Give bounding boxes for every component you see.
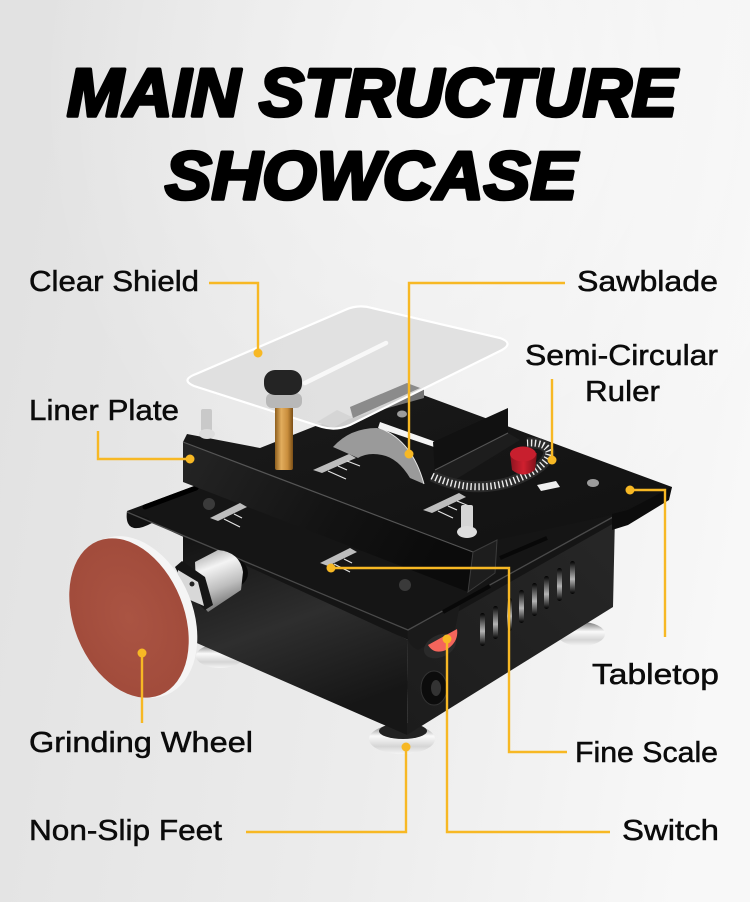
title: SHOWCASE <box>165 138 580 214</box>
red knob <box>510 446 537 474</box>
callout: Liner Plate: Liner Plate <box>29 395 179 427</box>
clear shield <box>187 306 508 429</box>
thumb screw: left <box>199 409 215 439</box>
scale: top right <box>423 493 469 518</box>
mitre fence <box>433 408 520 486</box>
tabletop edge <box>612 487 672 530</box>
callout: Grinding Wheel <box>29 648 253 759</box>
callout: Clear Shield: Clear Shield <box>29 266 199 298</box>
callout: Semi-Circular Ruler: Ruler <box>585 376 661 408</box>
callout: Semi-Circular Ruler <box>525 340 719 464</box>
foot: front <box>369 723 435 754</box>
callout: Clear Shield <box>29 266 262 358</box>
callout: Tabletop <box>592 486 719 691</box>
housing right face <box>407 515 615 735</box>
fine scale markers <box>210 454 469 572</box>
ventilation slots <box>480 561 575 646</box>
thumb screw: right <box>457 505 477 538</box>
callout: Semi-Circular Ruler: Semi-Circular <box>525 340 719 372</box>
scale: top left <box>313 454 360 479</box>
blade slot insert <box>378 422 436 447</box>
power jack <box>421 671 447 705</box>
callout: Non-Slip Feet: Non-Slip Feet <box>29 815 222 847</box>
gold post with knob <box>264 370 302 470</box>
callout: Liner Plate <box>29 395 194 464</box>
screw: tabletop <box>397 410 599 487</box>
gray fence block seen through shield <box>350 383 420 418</box>
housing left face <box>183 530 408 735</box>
callout: Switch <box>442 634 719 847</box>
scale: tray centre <box>320 548 357 572</box>
callout: Switch: Switch <box>622 815 719 847</box>
callout: Fine Scale: Fine Scale <box>575 737 718 769</box>
title: MAIN STRUCTURE <box>67 55 680 131</box>
drill chuck <box>175 550 248 612</box>
title <box>67 55 680 214</box>
callout: Sawblade <box>404 266 718 458</box>
gray fence block through shield <box>350 383 424 418</box>
callout: Non-Slip Feet <box>29 742 410 847</box>
grinding wheel <box>47 517 220 717</box>
red switch <box>420 629 460 663</box>
foot: back right <box>557 622 605 646</box>
ruler slider <box>537 481 560 491</box>
beam end opening <box>468 540 497 592</box>
callout: Fine Scale <box>326 564 718 769</box>
sawblade <box>333 428 424 484</box>
scale: tray left <box>210 503 247 527</box>
callout: Tabletop: Tabletop <box>592 659 719 691</box>
beam front face: liner plate <box>183 442 473 592</box>
small gray block <box>317 410 352 428</box>
foot: back left <box>196 644 244 668</box>
semi-circular ruler <box>432 443 549 487</box>
lower tray plate <box>127 485 628 650</box>
product illustration: mini table saw <box>47 306 672 754</box>
callout: Sawblade: Sawblade <box>577 266 718 298</box>
upper table surface <box>183 395 672 552</box>
callout: Grinding Wheel: Grinding Wheel <box>29 727 253 759</box>
